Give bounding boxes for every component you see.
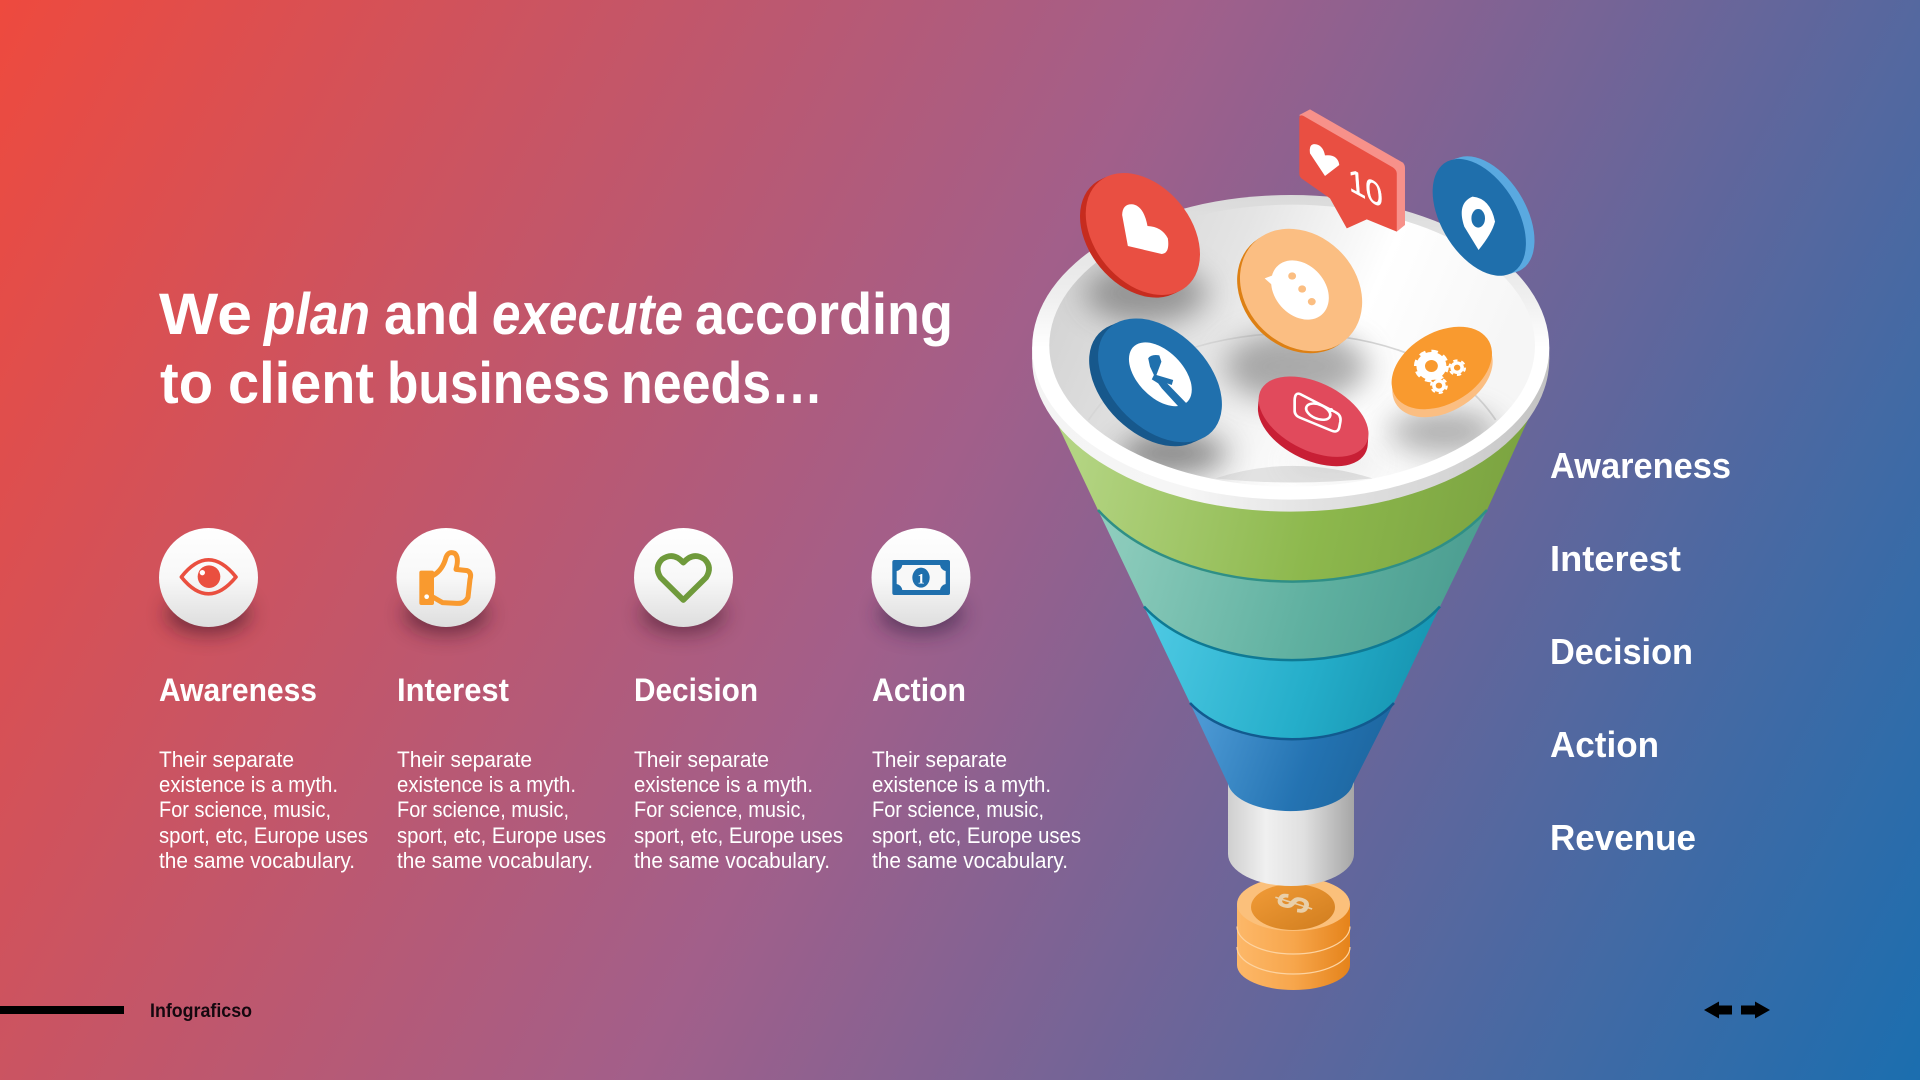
funnel stage labels: Action bbox=[1550, 724, 1659, 765]
icon: facebook disc bbox=[1064, 296, 1247, 468]
arrow: next bbox=[1741, 1002, 1770, 1018]
body text: sport, etc, Europe uses bbox=[872, 823, 1081, 848]
funnel stage labels: Awareness bbox=[1550, 445, 1731, 486]
funnel stage labels bbox=[1550, 445, 1731, 858]
title: plan bbox=[262, 282, 370, 347]
panel: awareness bbox=[159, 528, 368, 873]
title: and bbox=[384, 282, 480, 347]
bowl interior bbox=[1049, 205, 1535, 487]
title: We bbox=[159, 282, 252, 347]
heading: Decision bbox=[634, 672, 758, 708]
body text bbox=[159, 747, 368, 873]
arrow: previous bbox=[1704, 1002, 1732, 1018]
title: needs… bbox=[621, 351, 823, 416]
icon: like notification bubble bbox=[1299, 109, 1405, 232]
funnel bbox=[1032, 109, 1554, 990]
title: business bbox=[387, 351, 610, 416]
body text: For science, music, bbox=[872, 797, 1044, 822]
funnel stage labels: Decision bbox=[1550, 631, 1693, 672]
body text: For science, music, bbox=[159, 797, 331, 822]
body text: existence is a myth. bbox=[872, 772, 1051, 797]
body text: existence is a myth. bbox=[397, 772, 576, 797]
heading: Action bbox=[872, 672, 966, 708]
icon: chat disc bbox=[1212, 207, 1387, 375]
icon: thumbs up bbox=[396, 528, 496, 634]
icon: instagram disc bbox=[1243, 360, 1383, 483]
body text: Their separate bbox=[872, 747, 1007, 772]
body text bbox=[872, 747, 1081, 873]
title bbox=[159, 282, 953, 416]
body text: the same vocabulary. bbox=[397, 848, 593, 873]
funnel band: green bbox=[1046, 400, 1537, 582]
neck cylinder bbox=[1228, 770, 1354, 886]
icon: banknote: 1 bbox=[917, 571, 925, 587]
body text bbox=[397, 747, 606, 873]
funnel band: cyan bbox=[1144, 606, 1440, 739]
body text: the same vocabulary. bbox=[872, 848, 1068, 873]
icon: settings gears disc bbox=[1375, 310, 1509, 434]
body text bbox=[634, 747, 843, 873]
body text: existence is a myth. bbox=[634, 772, 813, 797]
heading: Awareness bbox=[159, 672, 317, 708]
body text: sport, etc, Europe uses bbox=[397, 823, 606, 848]
body text: sport, etc, Europe uses bbox=[634, 823, 843, 848]
coin stack: $ bbox=[1266, 888, 1322, 919]
icon: red heart disc bbox=[1056, 153, 1224, 318]
heading: Interest bbox=[397, 672, 509, 708]
body text: the same vocabulary. bbox=[159, 848, 355, 873]
body text: For science, music, bbox=[397, 797, 569, 822]
footer brand: Infograficso bbox=[150, 1001, 252, 1022]
title: client bbox=[228, 351, 374, 416]
icon: banknote bbox=[872, 528, 970, 634]
icon: eye bbox=[159, 528, 258, 634]
body text: Their separate bbox=[634, 747, 769, 772]
bowl and icons bbox=[1032, 109, 1554, 512]
panel: action bbox=[872, 528, 1081, 873]
funnel stage labels: Revenue bbox=[1550, 817, 1696, 858]
body text: Their separate bbox=[159, 747, 294, 772]
title: according bbox=[695, 282, 953, 347]
body text: the same vocabulary. bbox=[634, 848, 830, 873]
panel: decision bbox=[634, 528, 843, 873]
title: execute bbox=[492, 282, 683, 347]
footer bar bbox=[0, 1006, 124, 1014]
icon: like notification bubble: 10 bbox=[1347, 161, 1384, 216]
funnel band: blue bbox=[1190, 703, 1394, 811]
funnel band: teal bbox=[1098, 510, 1487, 660]
body text: Their separate bbox=[397, 747, 532, 772]
icon: location pin disc bbox=[1413, 142, 1554, 290]
panel: interest bbox=[396, 528, 606, 873]
funnel stage labels: Interest bbox=[1550, 538, 1681, 579]
icon: heart outline bbox=[634, 528, 733, 634]
coin stack bbox=[1237, 877, 1350, 990]
body text: For science, music, bbox=[634, 797, 806, 822]
body text: sport, etc, Europe uses bbox=[159, 823, 368, 848]
body text: existence is a myth. bbox=[159, 772, 338, 797]
title: to bbox=[160, 351, 213, 416]
bowl lip bbox=[1032, 195, 1549, 512]
